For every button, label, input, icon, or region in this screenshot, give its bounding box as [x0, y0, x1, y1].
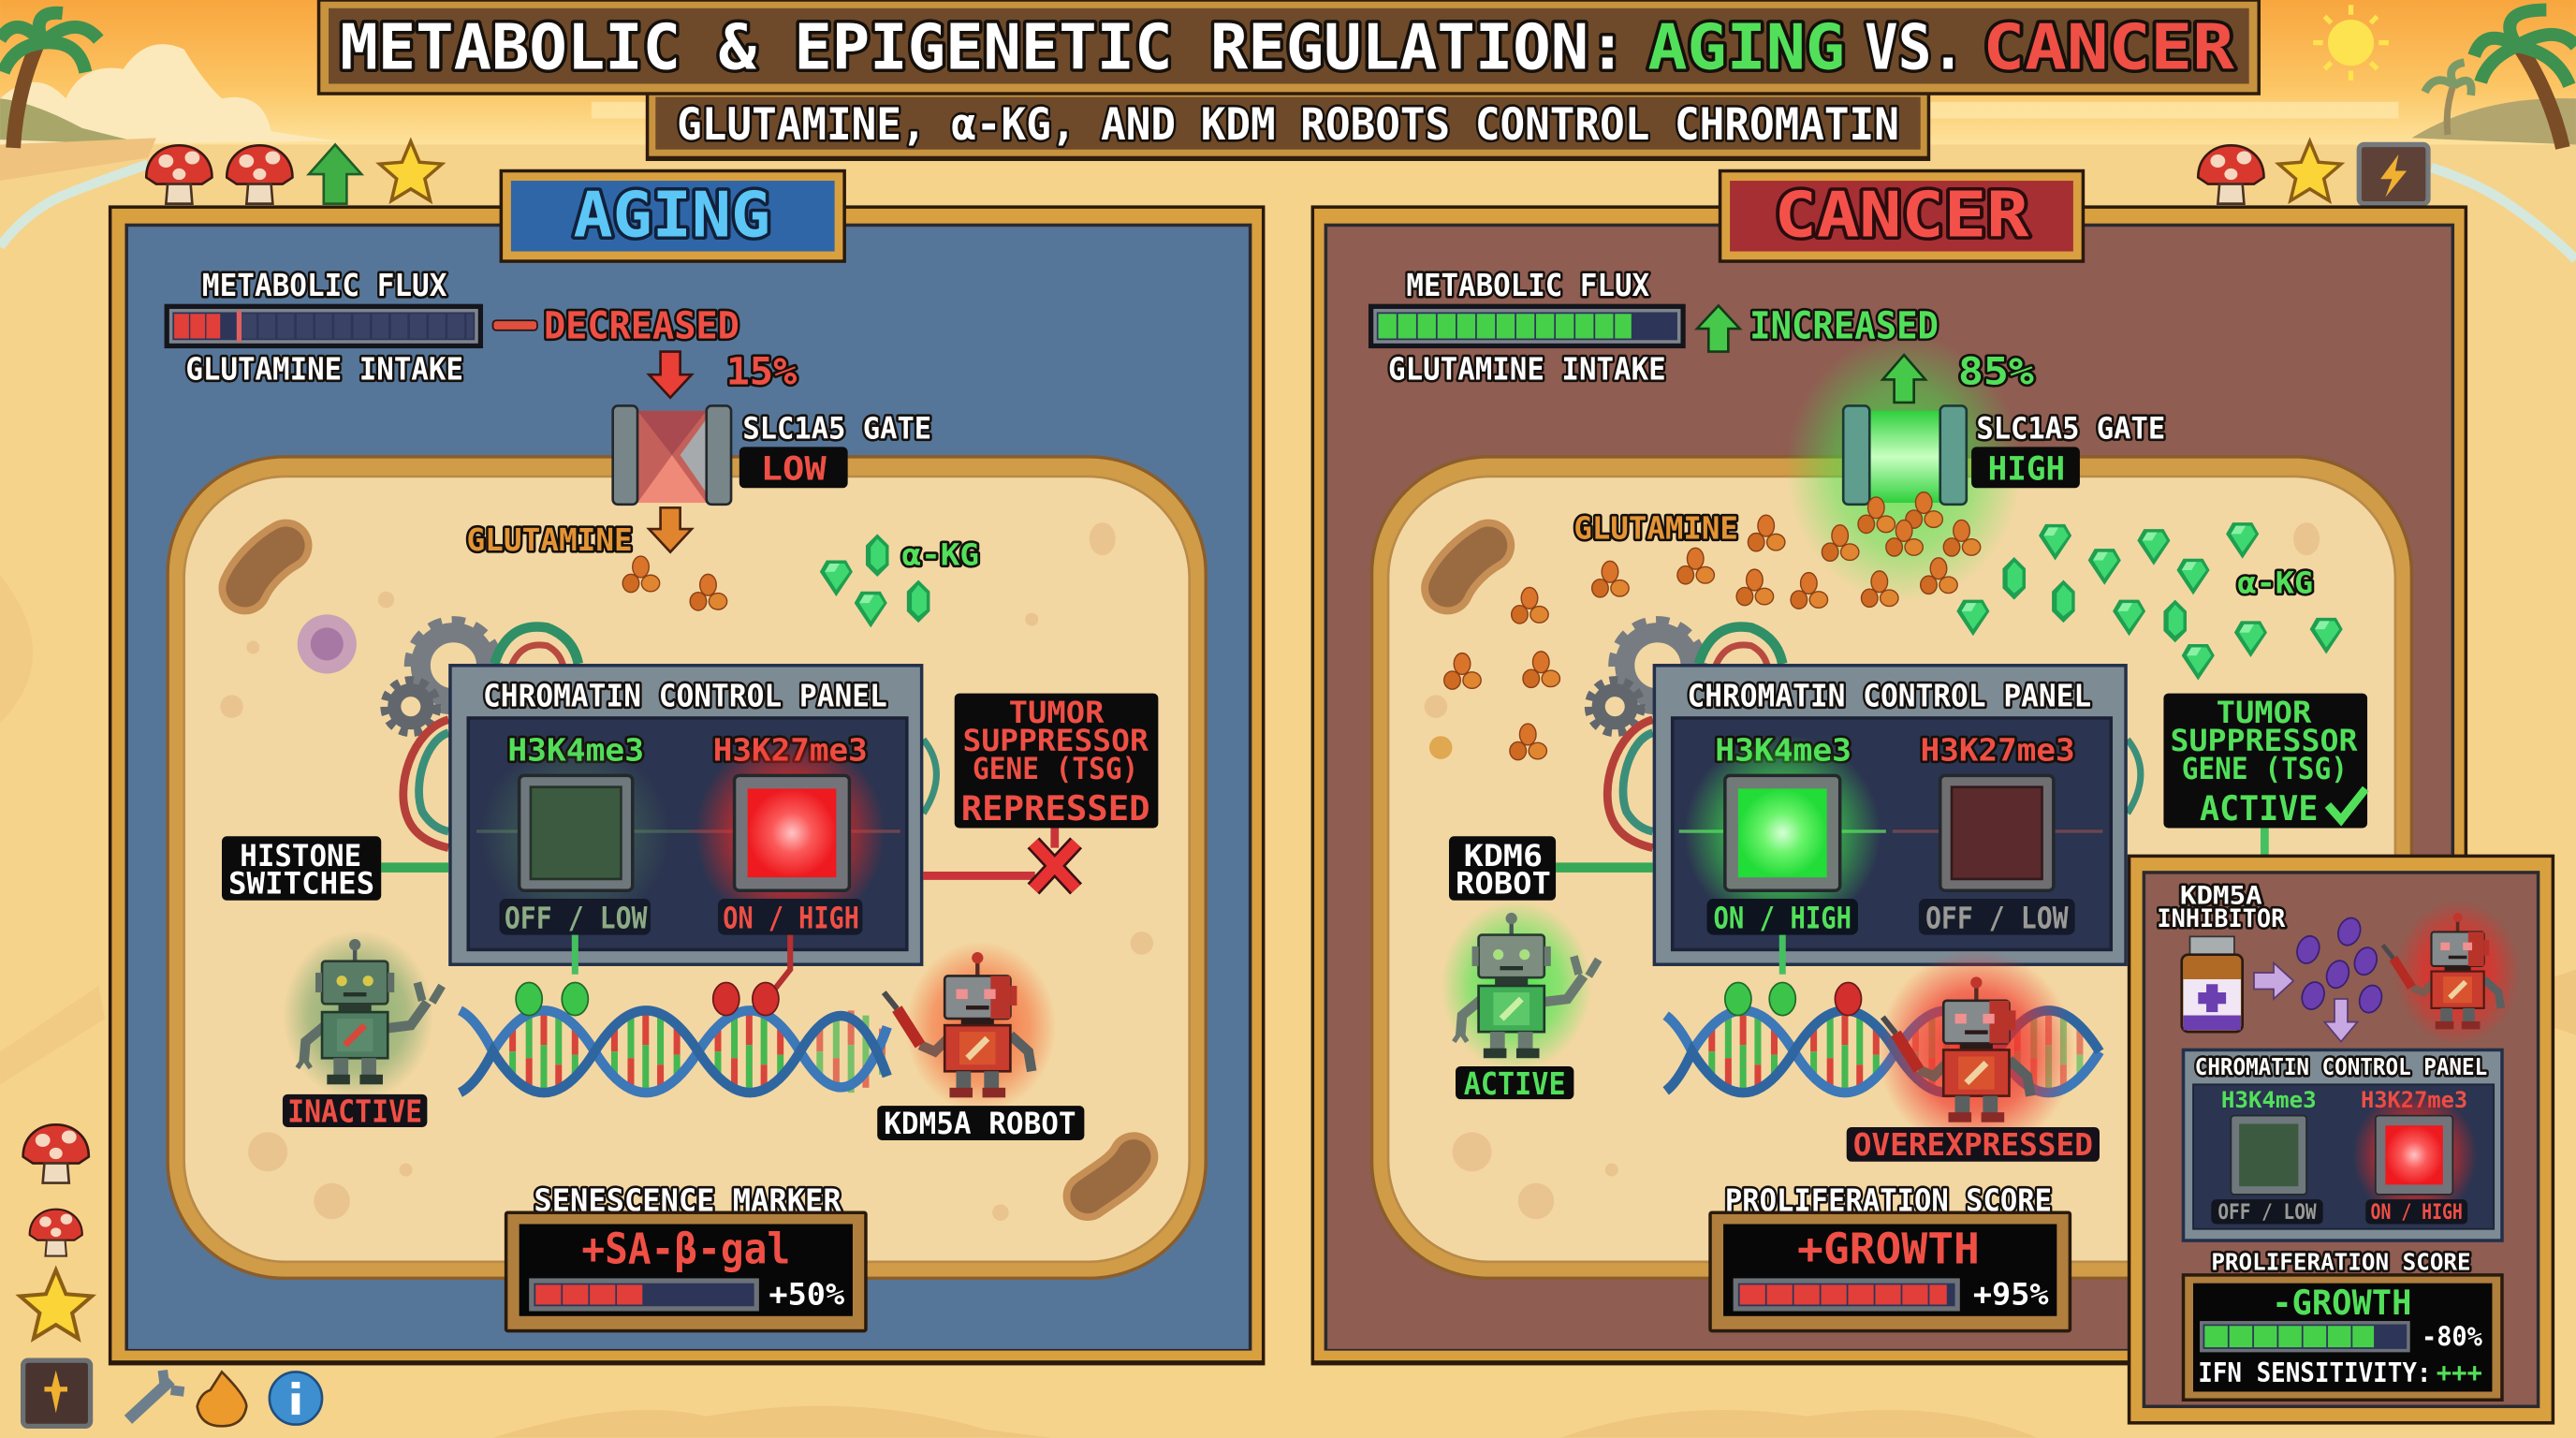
panel: cancer	[1311, 169, 2467, 1365]
arrow: inhibitor down	[2324, 999, 2358, 1042]
tumor suppressor gene repressed: REPRESSED	[961, 788, 1150, 829]
gate label: SLC1A5 GATE	[1976, 413, 2165, 447]
arrow: into gate	[649, 352, 692, 398]
kdm6 robot callout	[1449, 836, 1653, 902]
decorative icons: top left	[146, 141, 442, 204]
senescence marker: +50%	[768, 1278, 844, 1312]
inhibitor label: INHIBITOR	[2157, 905, 2285, 933]
tumor suppressor gene active: GENE (TSG)	[2182, 753, 2348, 786]
proliferation score: +GROWTH	[1797, 1225, 1980, 1274]
cancer tab: CANCER	[1774, 179, 2029, 252]
gears and wires	[385, 621, 578, 848]
percentage: 85%	[1958, 350, 2035, 394]
right palm trees	[2424, 10, 2576, 148]
flux increased: INCREASED	[1749, 304, 1939, 348]
label: kdm5a robot: KDM5A ROBOT	[884, 1108, 1076, 1141]
title banner	[317, 0, 2261, 95]
h3k4me3 label: H3K4me3	[507, 732, 644, 769]
panel: kdm5a inhibitor inset	[2128, 855, 2554, 1425]
connector to dna	[1780, 935, 1784, 975]
switch label: ON / HIGH	[2371, 1201, 2463, 1225]
proliferation score	[1708, 1181, 2071, 1332]
percentage: 15%	[726, 350, 798, 394]
senescence marker: +SA-β-gal	[581, 1225, 790, 1274]
kdm6 robot callout: KDM6	[1464, 840, 1543, 873]
switch on	[2376, 1116, 2452, 1195]
metabolic flux meter: METABOLIC FLUX	[202, 267, 446, 303]
chromatin control panel: CHROMATIN CONTROL PANEL	[483, 678, 887, 714]
glutamine label: GLUTAMINE	[466, 521, 633, 558]
flux decreased: DECREASED	[544, 304, 739, 348]
switch label: OFF / LOW	[2217, 1201, 2317, 1225]
clouds	[0, 44, 337, 144]
decorative icons: left column	[20, 1124, 92, 1426]
proliferation score: PROLIFERATION SCORE	[1725, 1181, 2052, 1218]
chromatin control panel	[1653, 664, 2128, 966]
robot: inhibited kdm5a	[2383, 901, 2520, 1045]
mitochondrion	[1447, 546, 1488, 588]
mini proliferation score: -GROWTH	[2272, 1283, 2411, 1323]
chromatin control panel	[448, 664, 923, 966]
arrow: glutamine in	[649, 507, 692, 552]
alpha-kg gems	[820, 534, 929, 627]
title: vs: VS.	[1865, 11, 1965, 84]
cancer tab	[1719, 169, 2085, 263]
kdm6 robot callout: ROBOT	[1456, 868, 1551, 902]
gears and wires	[1588, 621, 1782, 848]
arrow: into gate	[1882, 355, 1925, 403]
gate label: HIGH	[1988, 449, 2065, 488]
switch label: ON / HIGH	[723, 902, 859, 936]
connectors to dna	[573, 935, 577, 975]
mini proliferation score: +++	[2437, 1357, 2482, 1388]
gate label: SLC1A5 GATE	[742, 413, 931, 447]
tumor suppressor gene repressed	[955, 694, 1158, 829]
tumor suppressor gene repressed: TUMOR	[1009, 697, 1105, 730]
inhibitor label	[2157, 882, 2285, 933]
switch label: OFF / LOW	[1925, 902, 2070, 936]
cell: aging	[166, 455, 1208, 1280]
slc1a5 gate	[613, 405, 731, 505]
title text: METABOLIC & EPIGENETIC REGULATION:	[340, 11, 1627, 84]
chromatin control panel: CHROMATIN CONTROL PANEL	[1687, 678, 2091, 714]
mitochondrion	[1088, 1157, 1134, 1196]
histone switches callout	[222, 836, 448, 902]
senescence marker	[505, 1181, 868, 1332]
aging tab: AGING	[574, 179, 770, 252]
switch off	[1940, 775, 2054, 890]
dna helix	[1666, 983, 2100, 1093]
mini proliferation score: -80%	[2422, 1321, 2482, 1352]
alpha-kg gems	[1956, 522, 2343, 681]
tumor suppressor gene active: SUPPRESSOR	[2170, 725, 2359, 758]
label: active: ACTIVE	[1464, 1065, 1566, 1102]
mini proliferation score: IFN SENSITIVITY:	[2198, 1357, 2431, 1388]
switch off	[520, 775, 633, 890]
switch on	[1725, 775, 1840, 890]
proliferation score: +95%	[1973, 1278, 2049, 1312]
robot: inactive	[283, 930, 442, 1101]
sand dunes	[0, 575, 105, 1084]
histone switches callout: HISTONE	[240, 840, 361, 873]
aging tab	[500, 169, 846, 263]
h3k27me3 label: H3K27me3	[713, 732, 868, 769]
h3k4me3 label: H3K4me3	[2221, 1087, 2317, 1113]
arrow: inhibitor right	[2254, 962, 2293, 999]
title: aging word: AGING	[1647, 11, 1845, 84]
cell: cancer	[1370, 455, 2413, 1280]
inhibitor molecules	[2293, 915, 2385, 1016]
glutamine molecules	[622, 556, 727, 610]
tumor suppressor gene repressed: GENE (TSG)	[973, 753, 1138, 786]
label: overexpressed: OVEREXPRESSED	[1853, 1126, 2093, 1163]
green glow	[1786, 333, 2022, 603]
tumor suppressor gene repressed: SUPPRESSOR	[963, 725, 1149, 758]
title: cancer word: CANCER	[1983, 11, 2235, 84]
robot: overexpressed	[1878, 949, 2075, 1153]
panel: aging	[109, 169, 1265, 1365]
robot: active	[1441, 901, 1599, 1071]
inhibitor label: KDM5A	[2180, 882, 2262, 910]
mitochondrion	[245, 546, 285, 588]
switch off	[2231, 1116, 2306, 1195]
tumor suppressor gene active	[2163, 694, 2367, 861]
mini chromatin control panel	[2182, 1049, 2504, 1242]
histone switches callout: SWITCHES	[228, 868, 374, 902]
tumor suppressor gene active: ACTIVE	[2200, 788, 2318, 829]
switch label: ON / HIGH	[1714, 902, 1852, 936]
senescence marker: SENESCENCE MARKER	[534, 1181, 842, 1218]
alpha-kg label: α-KG	[902, 539, 979, 573]
dna helix	[460, 983, 887, 1093]
glutamine molecules	[1429, 492, 1981, 760]
icon: inhibitor vial	[2182, 936, 2243, 1032]
tumor suppressor gene active: TUMOR	[2217, 697, 2312, 730]
gate label: LOW	[761, 449, 827, 488]
decorative icons: top right	[2198, 141, 2428, 204]
alpha-kg label: α-KG	[2237, 567, 2313, 601]
organelle	[298, 614, 357, 674]
flux increased	[1697, 304, 1939, 352]
mini chromatin control panel: CHROMATIN CONTROL PANEL	[2195, 1053, 2487, 1080]
metabolic flux meter: METABOLIC FLUX	[1406, 267, 1649, 303]
switch on	[735, 775, 849, 890]
robot: kdm5a	[884, 942, 1057, 1112]
slc1a5 gate	[1843, 405, 1967, 505]
metabolic flux meter	[1368, 267, 1686, 387]
left palm tree	[0, 13, 98, 148]
gate label	[1971, 413, 2165, 488]
metabolic flux meter	[165, 267, 483, 387]
metabolic flux meter: GLUTAMINE INTAKE	[185, 350, 463, 387]
decorative icons: wrench, flame, info	[128, 1371, 322, 1426]
switch label: OFF / LOW	[505, 902, 648, 936]
h3k27me3 label: H3K27me3	[2361, 1087, 2467, 1113]
mini proliferation score	[2182, 1249, 2504, 1401]
label: inactive: INACTIVE	[287, 1093, 422, 1130]
glutamine label: GLUTAMINE	[1573, 510, 1738, 547]
repressed x	[923, 829, 1076, 888]
h3k4me3 label: H3K4me3	[1715, 732, 1852, 769]
subtitle banner: GLUTAMINE, α-KG, AND KDM ROBOTS CONTROL CHROMATIN	[677, 99, 1899, 151]
sun	[2313, 5, 2389, 81]
metabolic flux meter: GLUTAMINE INTAKE	[1388, 350, 1666, 387]
gate label	[739, 413, 931, 488]
mini proliferation score: PROLIFERATION SCORE	[2211, 1249, 2471, 1276]
h3k27me3 label: H3K27me3	[1921, 732, 2075, 769]
